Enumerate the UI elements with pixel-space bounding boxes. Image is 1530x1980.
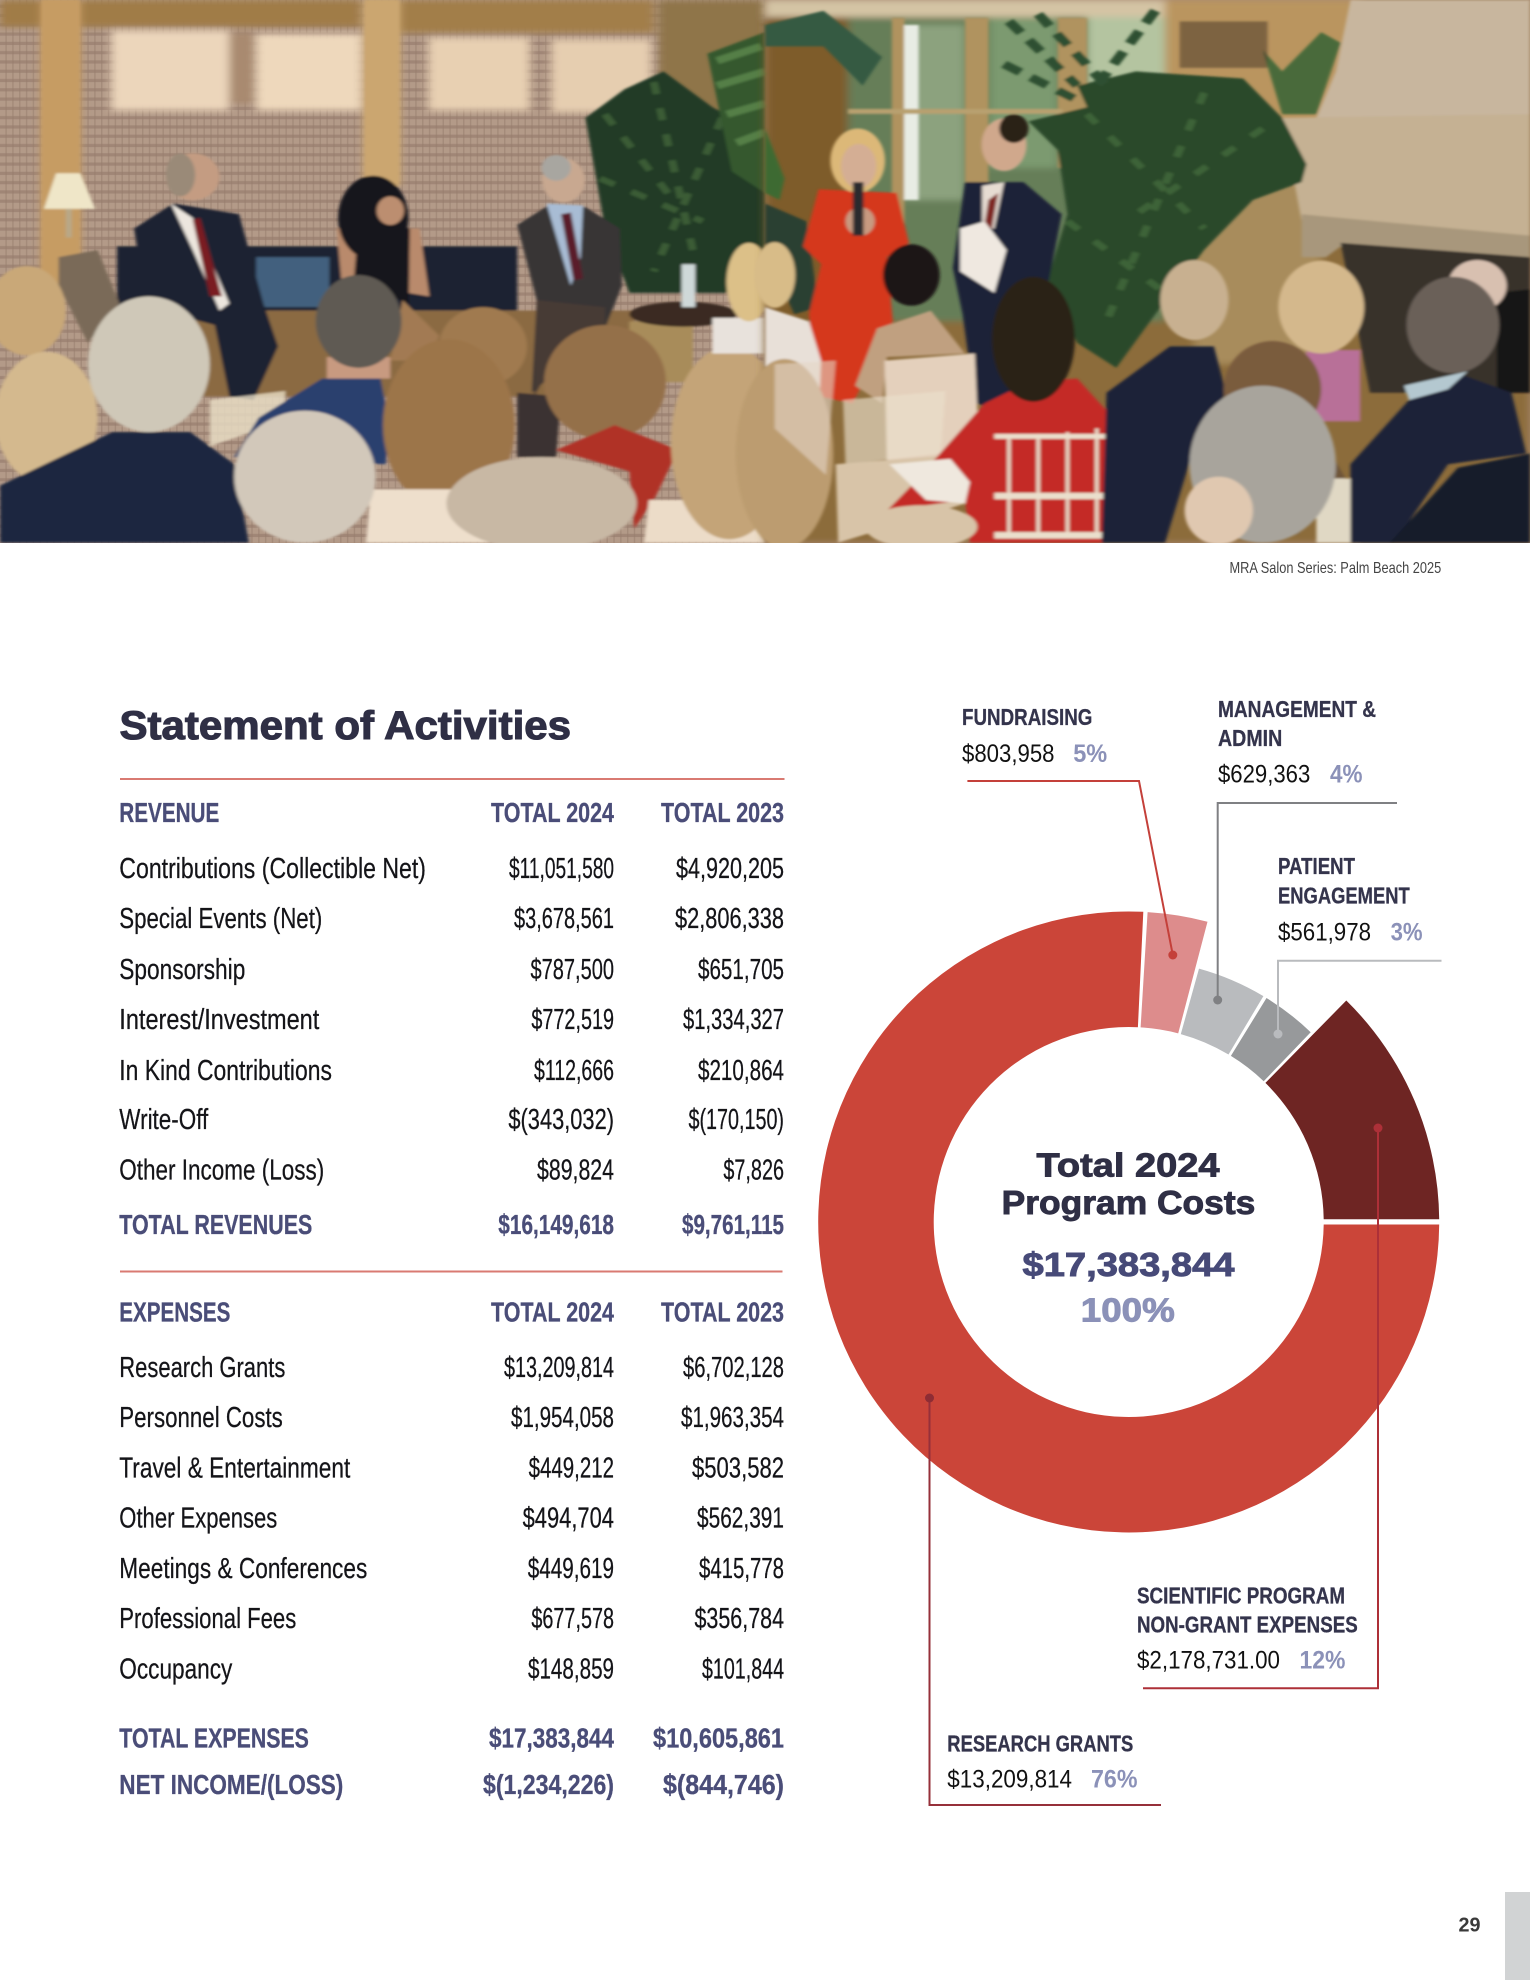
row: other income: $7,826 xyxy=(723,1155,784,1187)
row: other expenses: Other Expenses xyxy=(119,1503,277,1535)
row: travel xyxy=(119,1453,784,1485)
page number: 29 xyxy=(1458,1914,1480,1936)
callout: research grants: RESEARCH GRANTS xyxy=(947,1730,1133,1756)
row: professional fees xyxy=(119,1603,784,1635)
row: total expenses: TOTAL EXPENSES xyxy=(119,1723,309,1754)
row: meetings: $415,778 xyxy=(699,1553,784,1585)
row: contributions: $11,051,580 xyxy=(509,853,614,885)
row: contributions xyxy=(119,853,784,885)
donut chart: total 2024 program costs xyxy=(818,911,1439,1532)
callout: management and admin xyxy=(1218,696,1376,788)
row: write-off: Write-Off xyxy=(119,1104,208,1136)
row: special events: $2,806,338 xyxy=(675,903,784,935)
row: total expenses: $17,383,844 xyxy=(489,1723,614,1754)
woman two xyxy=(337,229,429,296)
row: special events: Special Events (Net) xyxy=(119,903,322,935)
segment: fundraising xyxy=(1141,912,1208,1033)
row: total revenues: $9,761,115 xyxy=(682,1209,784,1240)
row: meetings: Meetings & Conferences xyxy=(119,1553,367,1585)
row: sponsorship xyxy=(119,954,784,986)
heading: statement of activities: Statement of Activities xyxy=(120,704,571,748)
row: travel: $449,212 xyxy=(529,1453,614,1485)
row: net income: $(1,234,226) xyxy=(483,1769,614,1800)
row: personnel costs: $1,954,058 xyxy=(511,1402,614,1434)
leader line: research grants xyxy=(925,1394,1161,1805)
row: research grants: Research Grants xyxy=(119,1352,285,1384)
row: professional fees: $677,578 xyxy=(531,1603,614,1635)
callout: fundraising: $803,958 xyxy=(962,740,1054,768)
row: research grants: $13,209,814 xyxy=(504,1352,614,1384)
callout: management and admin: ADMIN xyxy=(1218,725,1282,751)
page tab xyxy=(1505,1892,1530,1980)
row: travel: $503,582 xyxy=(692,1453,784,1485)
callout: management and admin: $629,363 xyxy=(1218,760,1310,788)
row: meetings: $449,619 xyxy=(528,1553,614,1585)
callout: management and admin: MANAGEMENT & xyxy=(1218,696,1376,722)
row: write-off: $(343,032) xyxy=(508,1104,614,1136)
callout: scientific program: SCIENTIFIC PROGRAM xyxy=(1137,1582,1345,1608)
row: personnel costs: Personnel Costs xyxy=(119,1402,283,1434)
row: in kind: $112,666 xyxy=(534,1055,614,1087)
row: interest: Interest/Investment xyxy=(119,1004,319,1036)
row: other expenses: $494,704 xyxy=(523,1503,614,1535)
callout: management and admin: 4% xyxy=(1330,760,1362,788)
row: occupancy: $101,844 xyxy=(702,1654,784,1686)
table xyxy=(629,321,693,382)
segment: scientific program non-grant expenses xyxy=(1265,1000,1439,1219)
row: sponsorship: Sponsorship xyxy=(119,954,245,986)
row: total expenses: $10,605,861 xyxy=(653,1723,784,1754)
row: contributions: $4,920,205 xyxy=(676,853,784,885)
revenue header row: TOTAL 2023 xyxy=(661,797,784,828)
row: special events: $3,678,561 xyxy=(514,903,614,935)
callout: research grants xyxy=(947,1730,1138,1793)
leader line: management and admin xyxy=(1213,803,1397,1004)
callout: patient engagement: 3% xyxy=(1391,919,1423,947)
callout: fundraising xyxy=(962,704,1107,768)
revenue header row: REVENUE xyxy=(119,797,219,828)
row: interest: $772,519 xyxy=(531,1004,614,1036)
row: other income: $89,824 xyxy=(537,1155,614,1187)
row: net income: $(844,746) xyxy=(663,1769,784,1800)
row: total expenses xyxy=(119,1723,784,1754)
callout: scientific program: NON-GRANT EXPENSES xyxy=(1137,1612,1358,1638)
row: net income: NET INCOME/(LOSS) xyxy=(119,1769,343,1800)
row: research grants: $6,702,128 xyxy=(683,1352,784,1384)
revenue header row xyxy=(119,797,784,828)
callout: scientific program: 12% xyxy=(1300,1646,1346,1674)
audience left side xyxy=(0,266,66,355)
right audience xyxy=(1102,346,1226,543)
callout: scientific program: $2,178,731.00 xyxy=(1137,1646,1280,1674)
center label: total program costs: 100% xyxy=(1081,1292,1175,1328)
row: other income xyxy=(119,1155,784,1187)
leader line: scientific program xyxy=(1143,1124,1382,1688)
segment: research grants xyxy=(818,911,1439,1532)
row: interest xyxy=(119,1004,784,1036)
center label: total program costs xyxy=(1002,1146,1255,1328)
row: net income xyxy=(119,1769,784,1800)
row: personnel costs xyxy=(119,1402,784,1434)
expenses header row: TOTAL 2023 xyxy=(661,1297,784,1328)
row: travel: Travel & Entertainment xyxy=(119,1453,350,1485)
callout: research grants: 76% xyxy=(1091,1765,1138,1793)
row: interest: $1,334,327 xyxy=(683,1004,784,1036)
row: special events xyxy=(119,903,784,935)
row: sponsorship: $651,705 xyxy=(698,954,784,986)
row: professional fees: $356,784 xyxy=(694,1603,784,1635)
row: in kind: $210,864 xyxy=(698,1055,784,1087)
center label: total program costs: Total 2024 xyxy=(1036,1146,1220,1184)
expenses header row xyxy=(119,1297,784,1328)
row: personnel costs: $1,963,354 xyxy=(681,1402,784,1434)
plant and bench backdrop xyxy=(585,71,765,293)
palm and plant xyxy=(765,11,882,86)
center label: total program costs: Program Costs xyxy=(1002,1184,1255,1221)
man in navy xyxy=(953,182,1062,411)
man one xyxy=(134,204,278,400)
callout: patient engagement xyxy=(1278,853,1423,947)
callout: patient engagement: PATIENT xyxy=(1278,853,1356,879)
revenue header row: TOTAL 2024 xyxy=(491,797,614,828)
leader line: patient engagement xyxy=(1274,961,1442,1038)
row: occupancy: Occupancy xyxy=(119,1654,233,1686)
callout: fundraising: FUNDRAISING xyxy=(962,704,1092,730)
center label: total program costs: $17,383,844 xyxy=(1022,1246,1235,1283)
row: total revenues: TOTAL REVENUES xyxy=(119,1209,312,1240)
row: write-off: $(170,150) xyxy=(688,1104,784,1136)
row: professional fees: Professional Fees xyxy=(119,1603,296,1635)
callout: patient engagement: $561,978 xyxy=(1278,919,1371,947)
panel: statement of activities table xyxy=(119,704,785,1800)
middle audience xyxy=(855,311,965,404)
callout: patient engagement: ENGAGEMENT xyxy=(1278,882,1410,908)
segment: management and admin xyxy=(1181,969,1263,1054)
row: other income: Other Income (Loss) xyxy=(119,1155,324,1187)
row: research grants xyxy=(119,1352,784,1384)
photo: MRA Salon panel and seated audience xyxy=(0,0,1530,550)
leader line: fundraising xyxy=(967,781,1177,960)
expenses header row: TOTAL 2024 xyxy=(491,1297,614,1328)
row: other expenses xyxy=(119,1503,784,1535)
callout: research grants: $13,209,814 xyxy=(947,1765,1072,1793)
photo caption: MRA Salon Series: Palm Beach 2025 xyxy=(1230,560,1441,577)
woman in red xyxy=(803,189,909,404)
row: total revenues xyxy=(119,1209,784,1240)
fireplace xyxy=(1300,214,1530,258)
segment: patient engagement xyxy=(1231,998,1311,1081)
row: occupancy: $148,859 xyxy=(528,1654,614,1686)
row: in kind xyxy=(119,1055,784,1087)
row: write-off xyxy=(119,1104,784,1136)
row: meetings xyxy=(119,1553,784,1585)
row: total revenues: $16,149,618 xyxy=(498,1209,614,1240)
row: occupancy xyxy=(119,1654,784,1686)
callout: scientific program xyxy=(1137,1582,1358,1674)
row: contributions: Contributions (Collectible Net) xyxy=(119,853,426,885)
man three xyxy=(517,204,622,393)
row: other expenses: $562,391 xyxy=(697,1503,784,1535)
expenses header row: EXPENSES xyxy=(119,1297,230,1328)
row: in kind: In Kind Contributions xyxy=(119,1055,332,1087)
row: sponsorship: $787,500 xyxy=(530,954,614,986)
callout: fundraising: 5% xyxy=(1073,740,1107,768)
